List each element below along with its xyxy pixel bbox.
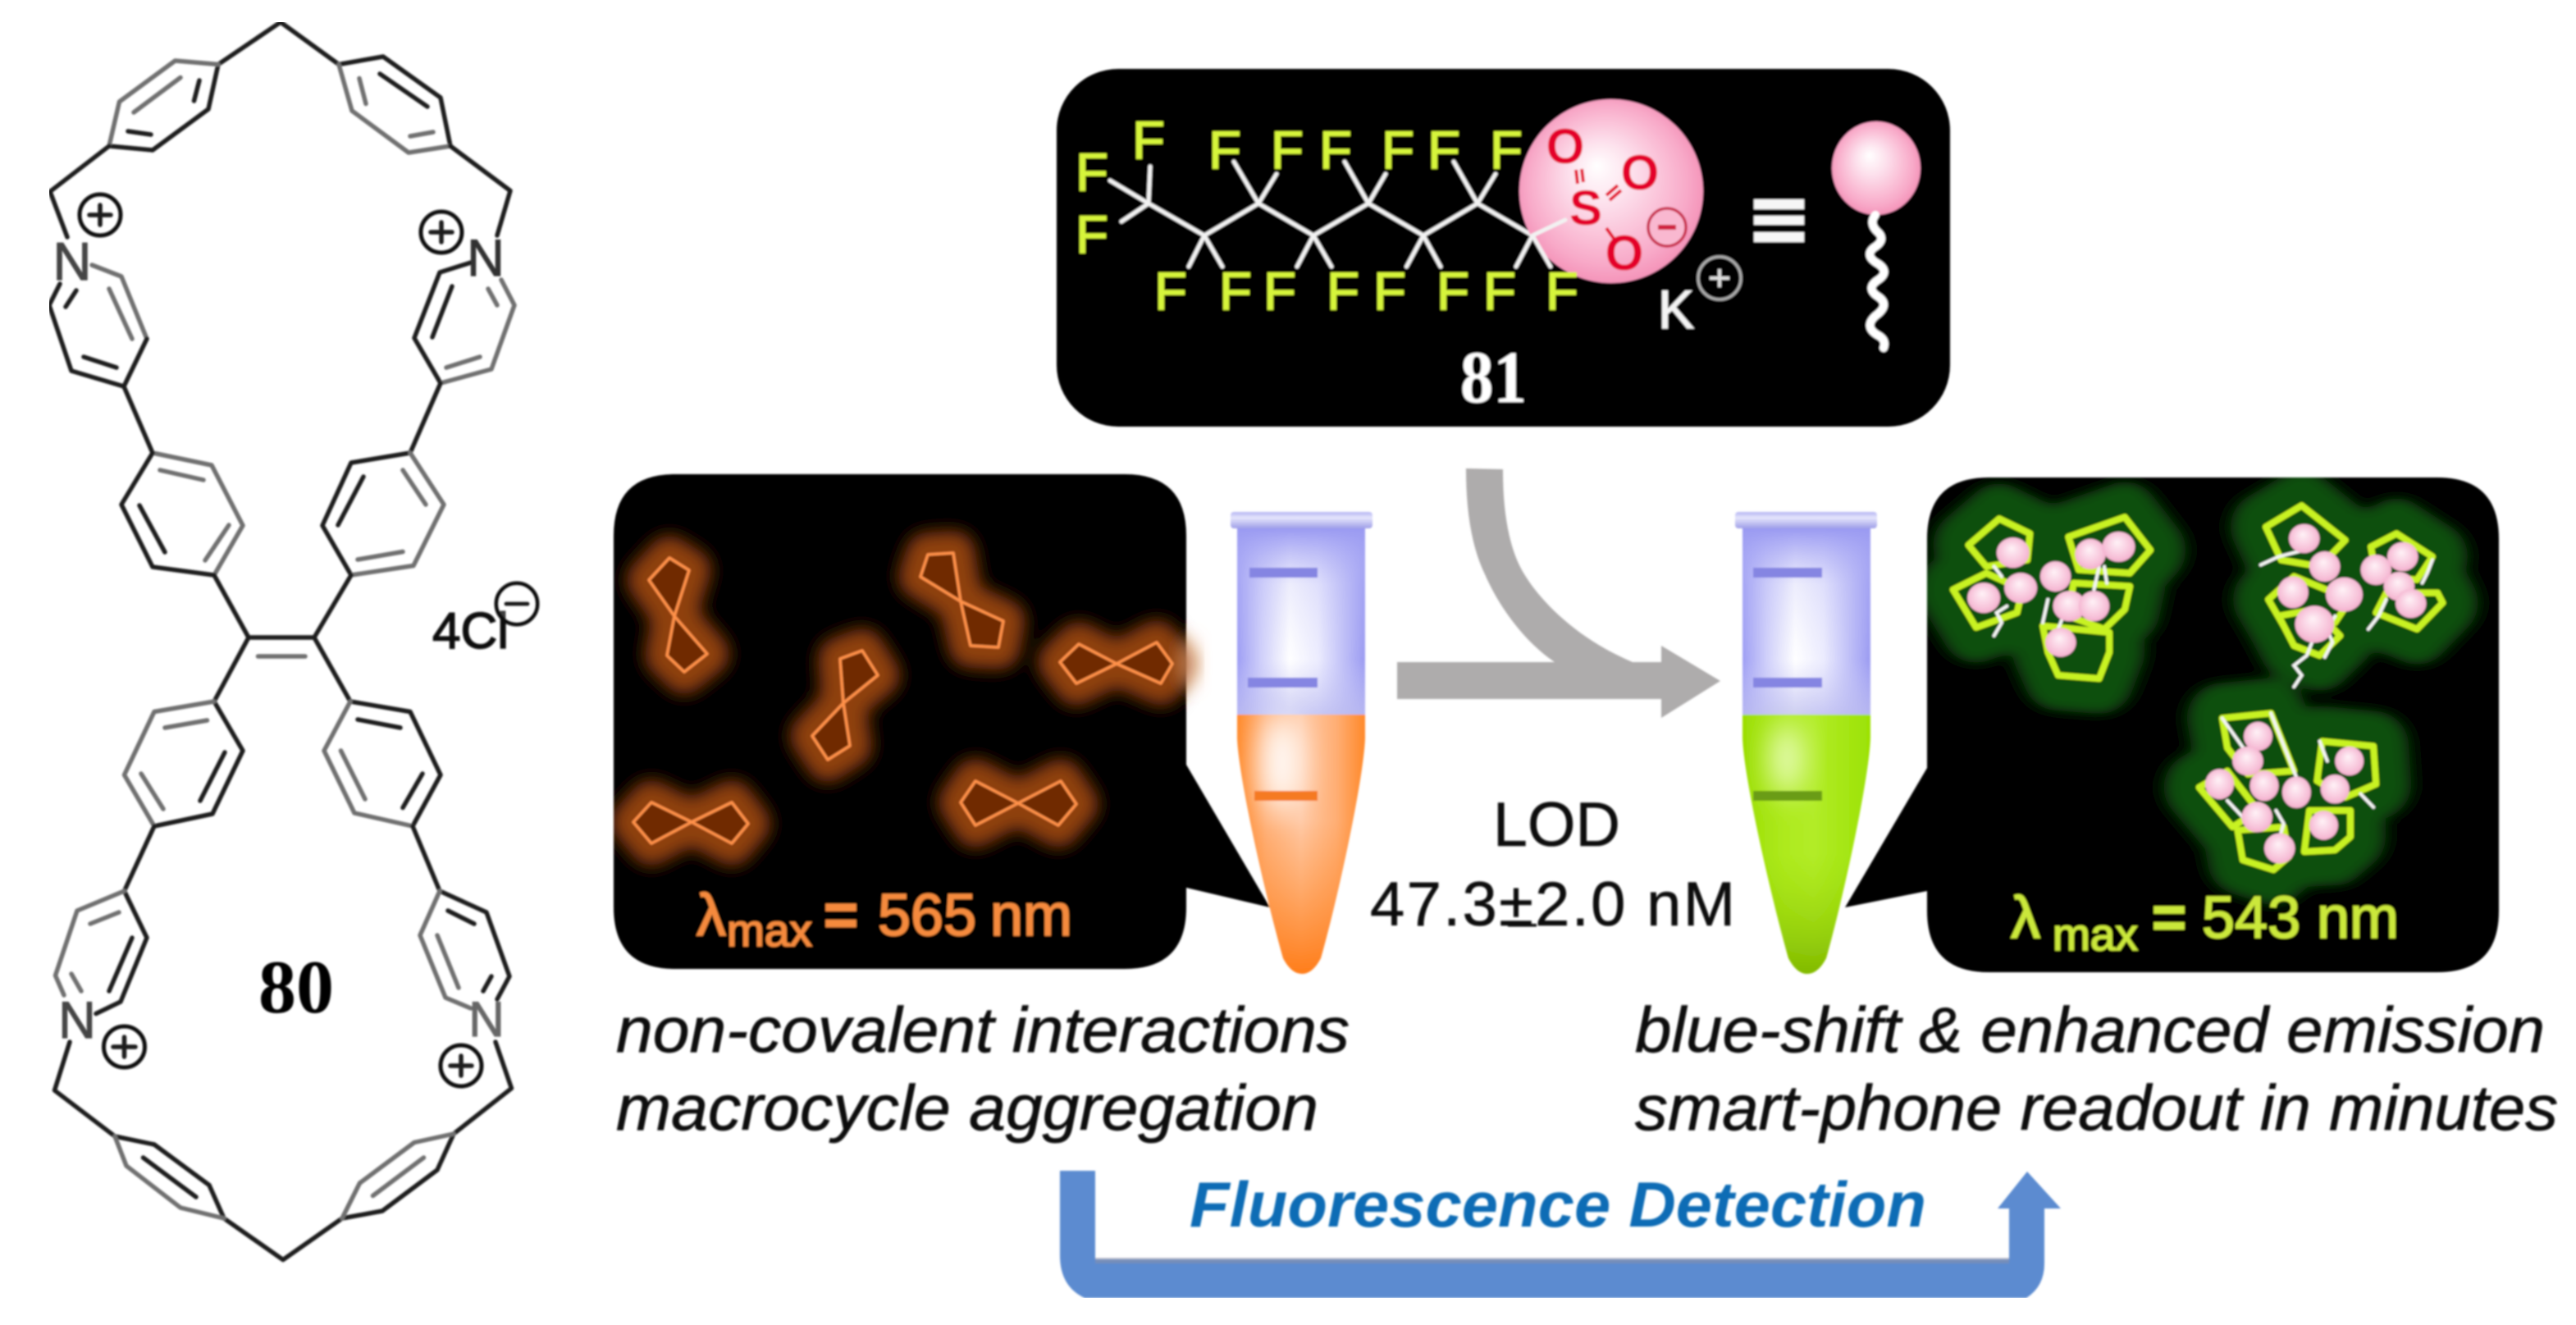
limit of detection label — [1370, 790, 1735, 939]
green micro-tube — [1735, 512, 1877, 977]
tube rim — [1735, 512, 1877, 528]
fluorine atom labels: F — [1219, 261, 1252, 321]
volume marks — [1248, 568, 1318, 801]
panel: orange aggregated macrocycles — [614, 474, 1270, 969]
callout panel with tail — [1845, 477, 2499, 972]
equivalence symbol — [1754, 199, 1804, 242]
orange micro-tube — [1231, 512, 1372, 977]
potassium counter-ion K+ — [1658, 257, 1741, 340]
panel: surfactant 81 — [1057, 69, 1950, 427]
blue U-shaped arrow — [1060, 1171, 2061, 1298]
pink sulfonate head ball: F — [1546, 261, 1578, 321]
fluorine atom labels — [1076, 110, 1523, 321]
cluster bottom — [2199, 713, 2376, 870]
pink sulfonate head ball: S — [1569, 180, 1602, 235]
callout panel with tail — [614, 474, 1270, 969]
upper phenyl rings — [121, 383, 444, 575]
fluorine atom labels: F — [1076, 142, 1108, 202]
pink sulfonate head ball: O — [1605, 226, 1643, 281]
lambda max 565 nm label: nm — [990, 883, 1072, 948]
lambda max 543 nm label: = — [2152, 885, 2186, 951]
molecule 80: tetracationic macrocycle structure — [49, 22, 537, 1260]
upper pyridinium rings with N+ — [49, 194, 514, 386]
lambda max 565 nm label: = — [824, 883, 858, 948]
caption right: blue-shift and enhanced emission, smart-phone readout — [1635, 994, 2558, 1144]
caption left: non-covalent interactions, macrocycle aggregation: non-covalent interactions — [616, 994, 1350, 1066]
lambda max 543 nm label: max — [2053, 909, 2138, 960]
fluorine atom labels: F — [1076, 204, 1108, 264]
perfluoro carbon chain bonds — [1110, 162, 1532, 267]
fluorine atom labels: F — [1154, 261, 1187, 321]
lower phenyl rings — [125, 701, 441, 891]
fluorine atom labels: F — [1132, 110, 1165, 170]
limit of detection label: 47.3±2.0 nM — [1370, 870, 1735, 939]
pink sulfonate head ball: O — [1546, 119, 1584, 174]
glow halos — [633, 553, 1172, 843]
faint orange glow beyond panel edge — [1178, 635, 1201, 691]
fluorine atom labels: F — [1483, 261, 1516, 321]
clusters drawn in scaled coordinates, clipped to the panel — [1953, 505, 2443, 870]
fluorine atom labels: F — [1427, 120, 1460, 180]
fluorine atom labels: F — [1436, 261, 1469, 321]
fluorine atom labels: F — [1373, 261, 1406, 321]
orange bow-tie macrocycles — [633, 553, 1172, 843]
fluorine atom labels: F — [1263, 261, 1296, 321]
lower pyridinium rings with N+: N — [58, 992, 96, 1049]
heading: Fluorescence Detection: Fluorescence Detection — [1190, 1168, 1926, 1240]
lambda max 565 nm label: max — [727, 905, 812, 956]
upper pyridinium rings with N+: N — [467, 230, 505, 287]
fluorine atom labels: F — [1490, 120, 1523, 180]
caption left: non-covalent interactions, macrocycle aggregation: macrocycle aggregation — [616, 1071, 1318, 1144]
green glow halos — [1953, 505, 2443, 870]
cluster top right — [2261, 505, 2443, 687]
surfactant icon: ball with wavy tail — [1832, 121, 1921, 348]
caption left: non-covalent interactions, macrocycle aggregation — [616, 994, 1350, 1144]
caption right: blue-shift and enhanced emission, smart-phone readout: blue-shift & enhanced emission — [1635, 994, 2545, 1066]
fluorine atom labels: F — [1271, 120, 1304, 180]
lambda max 543 nm label: nm — [2317, 885, 2399, 951]
lambda max 565 nm label: λ — [697, 883, 726, 948]
bottom methylene bridge and lower benzene rings — [54, 1042, 512, 1260]
tube glass body and green liquid — [1736, 528, 1877, 977]
central ethene double bond — [214, 575, 351, 701]
tube glass body and orange liquid — [1231, 528, 1372, 977]
lambda max 543 nm label: λ — [2011, 885, 2040, 951]
potassium counter-ion K+: K — [1658, 279, 1694, 340]
caption right: blue-shift and enhanced emission, smart-phone readout: smart-phone readout in minutes — [1635, 1071, 2558, 1144]
pink sulfonate head ball: O — [1621, 145, 1659, 200]
pink sulfonate head ball — [1519, 99, 1703, 321]
lambda max 543 nm label: 543 — [2202, 885, 2300, 951]
lower pyridinium rings with N+ — [56, 891, 509, 1086]
top methylene bridge and upper benzene rings — [50, 22, 510, 237]
limit of detection label: LOD — [1493, 790, 1620, 860]
compound label 81: 81 — [1460, 337, 1527, 418]
upper pyridinium rings with N+: N — [53, 231, 91, 291]
fluorine atom labels: F — [1319, 120, 1352, 180]
volume marks — [1753, 568, 1822, 801]
counter-ion label 4Cl minus: 4Cl — [432, 603, 509, 660]
fluorine atom labels: F — [1382, 120, 1414, 180]
cluster top left — [1953, 517, 2150, 678]
lower pyridinium rings with N+: N — [468, 992, 505, 1047]
lambda max 565 nm label: 565 — [878, 883, 976, 948]
compound label 80: 80 — [258, 945, 334, 1029]
grey reaction arrow — [1397, 468, 1720, 718]
tube rim — [1231, 512, 1372, 528]
fluorine atom labels: F — [1208, 120, 1241, 180]
panel: green surfactant-macrocycle aggregates — [1845, 477, 2499, 972]
counter-ion label 4Cl minus — [432, 583, 537, 660]
fluorine atom labels: F — [1327, 261, 1359, 321]
